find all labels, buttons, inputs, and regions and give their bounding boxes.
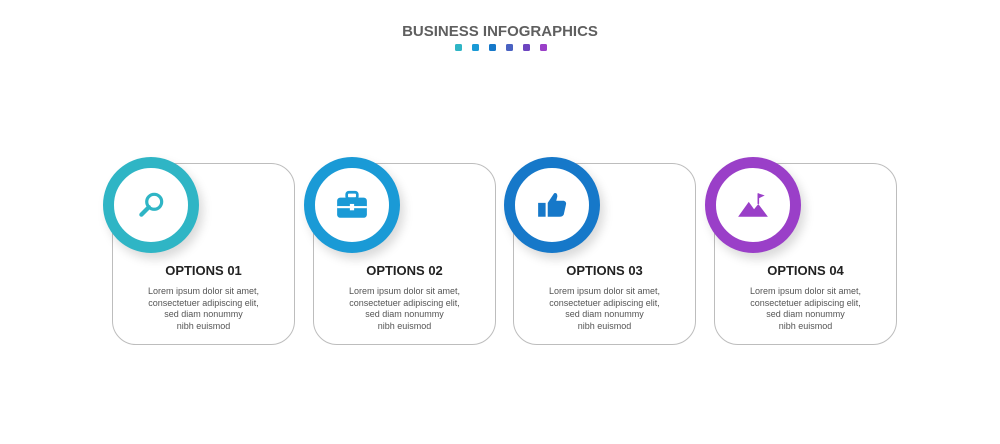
text 4: Lorem ipsum dolor sit amet, [750,286,861,296]
heading 3: OPTIONS 03 [566,263,643,278]
text 1: consectetuer adipiscing elit, [148,298,259,308]
text 1 [148,286,259,330]
text 2 [349,286,460,330]
text 3: nibh euismod [578,320,631,330]
text 3: Lorem ipsum dolor sit amet, [549,286,660,296]
color dots [455,44,547,51]
text 4: sed diam nonummy [766,309,845,319]
card 2 [313,163,496,345]
circle 3 with thumbs up icon [504,157,600,253]
circle 2 with briefcase icon [304,157,400,253]
title: BUSINESS INFOGRAPHICS [402,23,598,40]
text 4: nibh euismod [779,320,832,330]
text 1: nibh euismod [177,320,230,330]
text 1: Lorem ipsum dolor sit amet, [148,286,259,296]
text 4: consectetuer adipiscing elit, [750,298,861,308]
text 4 [750,286,861,330]
heading 1: OPTIONS 01 [165,263,242,278]
text 1: sed diam nonummy [164,309,243,319]
text 3: consectetuer adipiscing elit, [549,298,660,308]
text 3: sed diam nonummy [565,309,644,319]
text 3 [549,286,660,330]
card 1 [112,163,295,345]
text 2: consectetuer adipiscing elit, [349,298,460,308]
panel: option 1 [103,157,778,345]
panel: option 4 [705,157,897,345]
circle 1 with search icon [103,157,199,253]
heading 4: OPTIONS 04 [767,263,844,278]
text 2: sed diam nonummy [365,309,444,319]
card 3 [513,163,696,345]
card 4 [714,163,897,345]
heading 2: OPTIONS 02 [366,263,443,278]
text 2: nibh euismod [378,320,431,330]
panel: option 3 [504,157,778,345]
circle 4 with mountain flag icon [705,157,801,253]
panel: option 2 [304,157,888,345]
text 2: Lorem ipsum dolor sit amet, [349,286,460,296]
